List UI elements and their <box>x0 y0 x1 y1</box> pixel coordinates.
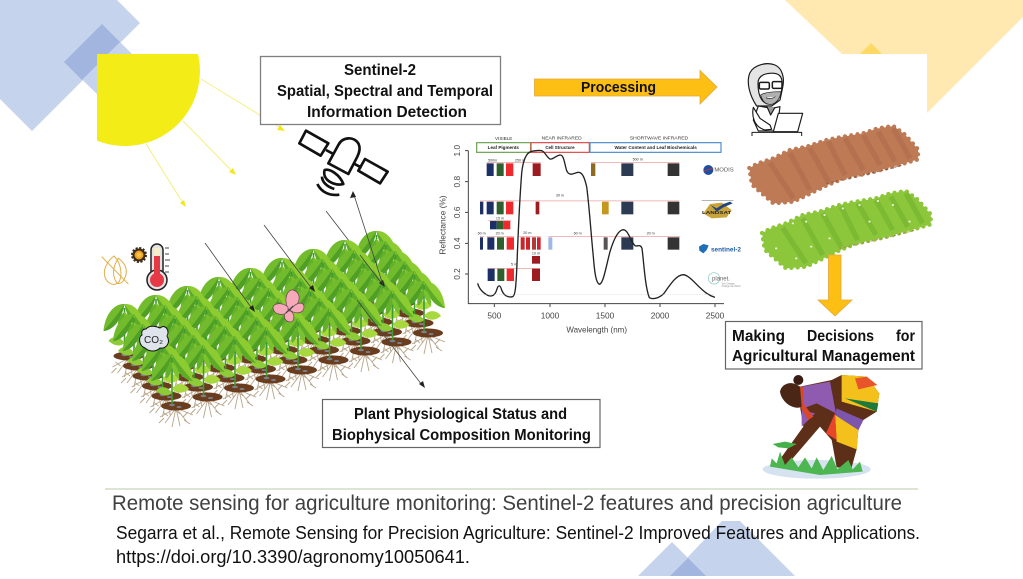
axis labels: 1.0 <box>452 145 462 156</box>
icon: satellite <box>299 131 388 195</box>
crop field <box>104 231 445 427</box>
satellite logos: MODIS <box>714 168 734 174</box>
citation <box>116 523 920 567</box>
axis labels: Wavelength (nm) <box>566 324 627 334</box>
spectral bands: 60 m <box>574 232 582 236</box>
chart headers: Water Content and Leaf Biochemicals <box>614 145 697 150</box>
satellite logos: planet. <box>712 276 730 282</box>
axis labels: 1000 <box>541 311 560 321</box>
background shapes: yellow corner <box>785 0 1023 113</box>
green canopy model <box>762 191 931 268</box>
plant status box: Biophysical Composition Monitoring <box>332 427 591 444</box>
axis labels: 500 <box>487 311 502 321</box>
satellite logos: See Change, <box>722 283 736 285</box>
axis labels: 0.2 <box>452 268 462 280</box>
icon: butterfly <box>273 290 304 322</box>
axis labels: Reflectance (%) <box>438 195 448 254</box>
reflectance curve <box>478 150 715 299</box>
decision box <box>726 322 922 369</box>
spectral bands: 10 m <box>532 251 540 255</box>
chart headers: Leaf Pigments <box>488 145 519 150</box>
spectral bands: 500 m <box>633 157 643 161</box>
spectral bands: 30 m <box>556 194 564 198</box>
down arrow <box>818 255 852 316</box>
axis labels: 2500 <box>706 311 725 321</box>
spectral bands: 60 m <box>478 232 486 236</box>
spectral bands: 5 m <box>511 263 517 267</box>
satellite logos: Change the World <box>722 285 741 288</box>
brown canopy model <box>749 126 918 203</box>
citation: https://doi.org/10.3390/agronomy10050641. <box>116 547 470 567</box>
caption title: Remote sensing for agriculture monitoring: Sentinel-2 features and precision agriculture <box>112 492 902 515</box>
processing arrow: Processing <box>581 79 656 96</box>
spectral bands: 20 m <box>496 232 504 236</box>
chart headers: SHORTWAVE INFRARED <box>630 135 689 141</box>
chart headers: Cell Structure <box>545 145 575 150</box>
axis labels: 0.8 <box>452 176 462 187</box>
person at laptop <box>748 64 803 136</box>
spectral bands: 20 m <box>523 231 531 235</box>
decision box: Agricultural Management <box>732 348 916 365</box>
icon: CO2 cloud <box>140 326 168 351</box>
decision box: Decisions <box>807 328 874 345</box>
axis labels: 0.4 <box>452 237 462 249</box>
arrows: sensor and soil lines <box>230 191 425 388</box>
chart axes <box>465 151 724 307</box>
axis labels: 0.6 <box>452 206 462 218</box>
reflectance chart <box>438 135 742 334</box>
decision box: for <box>896 328 915 345</box>
icon: leaves <box>102 256 128 284</box>
satellite logos <box>699 165 742 288</box>
caption rule <box>105 488 918 490</box>
processing arrow <box>534 70 717 104</box>
spectral bands: 250 m <box>515 158 525 162</box>
decision box: Making <box>732 328 785 345</box>
icon: thermometer <box>147 244 170 290</box>
citation: Segarra et al., Remote Sensing for Precision Agriculture: Sentinel-2 Improved Features and Applications. <box>116 523 920 543</box>
axis labels: 1500 <box>596 311 615 321</box>
background shapes: blue diamonds <box>0 0 140 131</box>
arrows: reflected signal <box>205 211 383 310</box>
chart headers: VISIBLE <box>495 136 513 142</box>
plant status box: Plant Physiological Status and <box>354 406 567 423</box>
spectral bands: 20 m <box>647 232 655 236</box>
satellite logos: sentinel-2 <box>711 248 742 254</box>
chart headers <box>477 135 721 152</box>
spectral bands: 15 m <box>496 216 504 220</box>
icon: gear sun <box>132 248 146 262</box>
axis labels: 2000 <box>651 311 670 321</box>
sun rays <box>146 79 285 207</box>
icon: CO2 cloud: CO₂ <box>144 335 163 346</box>
satellite logos: LANDSAT <box>702 210 731 216</box>
background shapes: blue triangles <box>638 521 795 576</box>
farmer illustration <box>763 375 879 479</box>
chart headers: NEAR INFRARED <box>542 135 582 141</box>
spectral bands: 500m <box>488 158 497 162</box>
title box: Sentinel-2 <box>260 56 500 124</box>
title box: Sentinel-2: Information Detection <box>307 104 467 121</box>
plant status box <box>322 400 600 448</box>
axis labels <box>438 145 725 334</box>
spectral bands <box>478 157 680 281</box>
title box: Sentinel-2: Sentinel-2 <box>344 62 416 79</box>
title box: Sentinel-2: Spatial, Spectral and Temporal <box>277 83 493 100</box>
icon: sun <box>97 54 200 146</box>
